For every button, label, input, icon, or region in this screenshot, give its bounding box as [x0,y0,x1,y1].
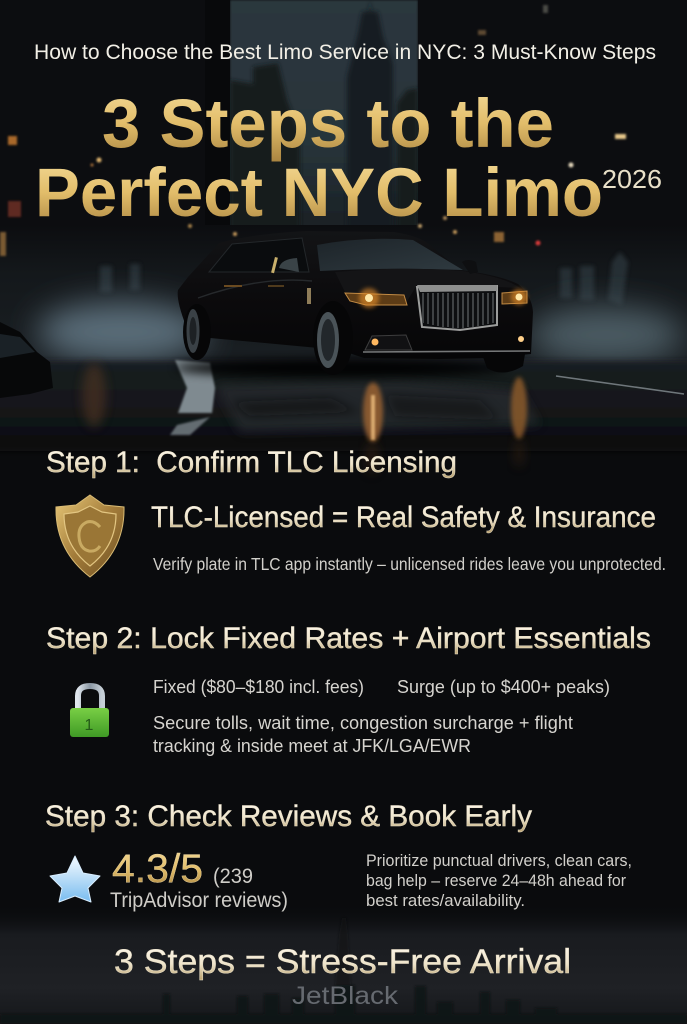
title line 2: Perfect NYC Limo [35,154,603,231]
step 2 [46,622,651,756]
icon: green padlock: 1 [85,717,94,734]
window lights [0,5,626,256]
icon: blue star [50,856,100,902]
rating: TripAdvisor reviews) [110,889,288,912]
main title [35,85,662,231]
skyline dusk clouds [0,905,687,1024]
street haze [0,225,687,365]
closing line: 3 Steps = Stress-Free Arrival [114,943,571,981]
advice: bag help – reserve 24–48h ahead for [366,871,626,890]
distant tower [347,0,393,240]
advice: Prioritize punctual drivers, clean cars, [366,851,632,870]
subheading: TLC-Licensed = Real Safety & Insurance [151,501,656,534]
sky gap between buildings [230,0,418,240]
fixed rate: Fixed ($80–$180 incl. fees) [153,677,364,697]
step 1 [46,446,666,577]
brand watermark: JetBlack [292,982,399,1010]
side windows [209,238,309,272]
icon: gold shield [56,495,124,577]
rating: (239 [213,865,253,888]
rear wheel [183,304,211,360]
fog left [37,302,207,362]
step 3 [45,800,632,912]
rating [110,847,288,912]
dark parked car at left [0,322,53,398]
fog right [528,307,684,363]
left headlight [345,288,407,308]
road reflections [82,360,684,474]
surge rate: Surge (up to $400+ peaks) [397,677,610,697]
step 2 heading: Step 2: Lock Fixed Rates + Airport Essentials [46,622,651,655]
hood [335,269,520,303]
fog lamps [365,335,524,350]
top heading: How to Choose the Best Limo Service in NYC: 3 Must-Know Steps [34,40,656,64]
front wheel [313,301,353,375]
mirrors [279,258,299,272]
step 1 heading: Step 1: Confirm TLC Licensing [46,446,457,479]
icon: green padlock [70,686,109,737]
grille [417,285,497,330]
limousine [175,231,533,377]
advice [366,851,632,910]
title line 1: 3 Steps to the [102,85,554,162]
rating: 4.3/5 [112,847,203,891]
ground shadow [175,359,505,377]
windshield [317,239,463,271]
dark buildings left [0,0,230,240]
details: tracking & inside meet at JFK/LGA/EWR [153,735,471,756]
step 3 heading: Step 3: Check Reviews & Book Early [45,800,532,833]
right headlight [502,289,527,305]
advice: best rates/availability. [366,891,525,910]
front lip [363,351,530,352]
car body [178,231,533,359]
distant buildings [230,63,300,240]
side reflections [198,280,312,298]
road surface [0,361,687,451]
crowd silhouettes [100,252,628,305]
details: Secure tolls, wait time, congestion surcharge + flight [153,712,573,733]
year: 2026 [602,164,662,194]
far front wheel [482,354,525,373]
details [153,712,573,756]
distant skyline [0,918,687,1024]
dark buildings right [418,0,687,240]
